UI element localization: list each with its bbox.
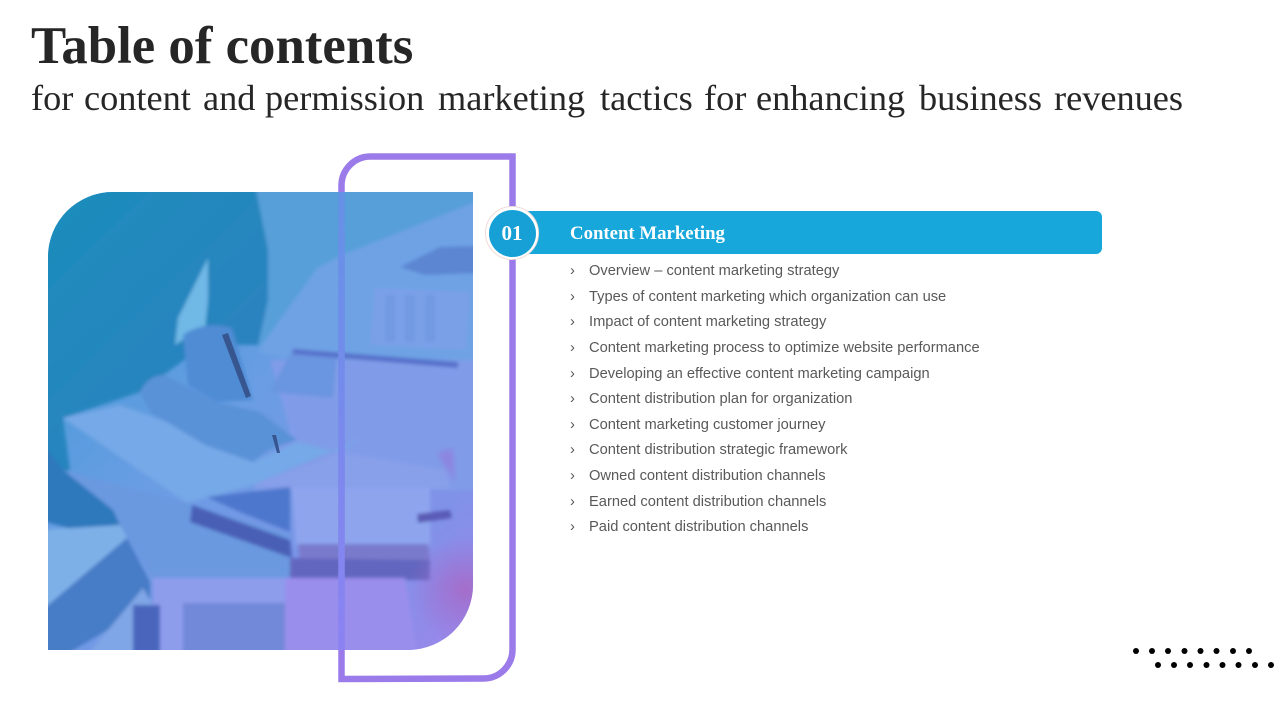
list of topics (570, 263, 980, 535)
list of topics: Overview – content marketing strategy (589, 263, 839, 279)
list of topics: › (570, 391, 575, 407)
photo: chart on paper (370, 288, 470, 350)
list of topics: Earned content distribution channels (589, 494, 826, 510)
subtitle: enhancing (756, 78, 905, 118)
subtitle: for (704, 78, 746, 118)
subtitle: revenues (1054, 78, 1183, 118)
photo: binder and shadow (207, 487, 290, 532)
photo: lower right papers (253, 360, 480, 490)
frame: overlap over photo (338, 192, 345, 650)
illustration: photo panel with frame (48, 153, 516, 682)
list of topics: Paid content distribution channels (589, 519, 808, 535)
number badge (485, 206, 539, 260)
list of topics: Developing an effective content marketing campaign (589, 366, 930, 382)
list of topics: › (570, 519, 575, 535)
photo: pen (222, 333, 251, 398)
photo panel (40, 185, 480, 655)
subtitle: permission (265, 78, 424, 118)
photo: pink glow (420, 549, 473, 630)
list of topics: Content marketing process to optimize website performance (589, 340, 980, 356)
list of topics: › (570, 494, 575, 510)
photo: upper right background (255, 192, 473, 345)
photo: shirt cuff (175, 258, 208, 345)
photo: left paper stack (48, 523, 126, 607)
photo: notebook (292, 488, 430, 546)
header text: Content Marketing (570, 223, 725, 244)
list of topics: › (570, 417, 575, 433)
photo: desk (63, 470, 290, 578)
list of topics: Content distribution plan for organization (589, 391, 852, 407)
list of topics: › (570, 340, 575, 356)
subtitle: content (84, 78, 191, 118)
frame: purple outline (342, 156, 512, 679)
subtitle (31, 78, 1183, 118)
decorative dots (1133, 648, 1274, 668)
subtitle: for (31, 78, 73, 118)
list of topics: Owned content distribution channels (589, 468, 826, 484)
photo: upper paper (257, 200, 480, 360)
list of topics: Types of content marketing which organization can use (589, 289, 946, 305)
list of topics: › (570, 263, 575, 279)
subtitle: marketing (438, 78, 585, 118)
list of topics: › (570, 366, 575, 382)
list of topics: Content distribution strategic framework (589, 442, 848, 458)
photo: person dark sleeve (48, 192, 270, 473)
section header bar (485, 206, 1102, 260)
photo: lower paper (62, 404, 327, 502)
header bar background (512, 211, 1102, 254)
photo: laptop (152, 576, 286, 650)
list of topics: › (570, 468, 575, 484)
list of topics: › (570, 289, 575, 305)
subtitle: tactics (600, 78, 693, 118)
photo: tablet (400, 246, 480, 275)
list of topics: › (570, 442, 575, 458)
photo: left dark object (48, 452, 120, 530)
photo: forearm and hand (140, 375, 297, 462)
list of topics: Content marketing customer journey (589, 417, 826, 433)
title: Table of contents (31, 17, 413, 75)
list of topics: › (570, 314, 575, 330)
list of topics: Impact of content marketing strategy (589, 314, 826, 330)
subtitle: and (203, 78, 255, 118)
subtitle: business (919, 78, 1042, 118)
number badge: 01 (502, 220, 522, 244)
